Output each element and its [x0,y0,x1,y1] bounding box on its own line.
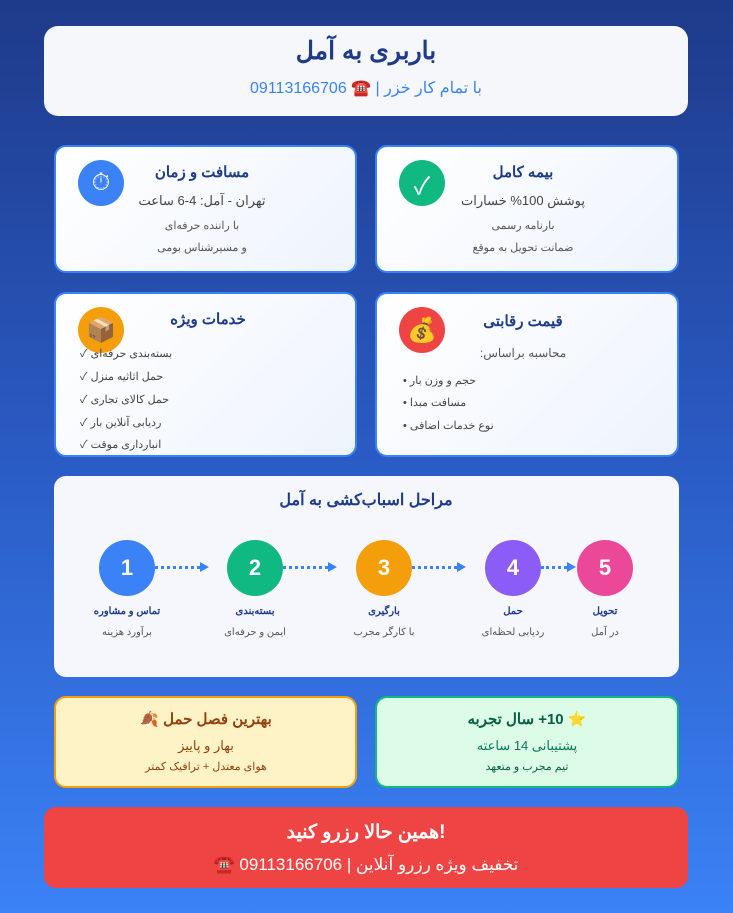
card: best season: بهترین فصل حمل 🍂 [140,711,272,728]
text: ردیابی لحظه‌ای [482,627,544,638]
card: special services: ✓ انبارداری موقت [80,439,161,451]
CTA banner [44,807,688,888]
step 5 [577,540,633,638]
card: distance time: تهران - آمل: 4-6 ساعت [139,193,265,208]
panel: steps: مراحل اسباب‌کشی به آمل [279,492,453,509]
card: pricing: حجم و وزن بار • [403,375,476,387]
text: 3 [378,555,390,580]
text: 4 [507,555,519,580]
card: insurance: بارنامه رسمی [491,220,555,232]
text: 5 [599,555,611,580]
card: pricing: محاسبه براساس: [480,346,566,360]
step 1 [94,540,160,638]
card: distance time: و مسیرشناس بومی [157,242,247,254]
card: experience: تیم مجرب و متعهد [486,761,568,773]
card: special services [54,292,357,457]
card: insurance: بیمه کامل [493,164,553,181]
step 4 [482,540,544,638]
text: بارگیری [368,606,400,617]
card: special services: ✓ حمل کالای تجاری [80,394,169,406]
text: تحویل [593,606,617,617]
icon: stopwatch [78,160,124,206]
text: 2 [249,555,261,580]
card: best season: هوای معتدل + ترافیک کمتر [145,761,267,773]
card: experience: پشتیبانی 14 ساعته [477,738,577,753]
card: insurance [375,145,679,273]
card: pricing: نوع خدمات اضافی • [403,420,494,432]
arrows [155,566,200,569]
icon: money bag: 💰 [407,316,437,344]
card: insurance: پوشش 100% خسارات [461,193,585,208]
step 3 [353,540,415,638]
card: insurance: ضمانت تحویل به موقع [473,242,573,254]
text: 1 [121,555,133,580]
card: experience: ⭐ 10+ سال تجربه [467,711,587,728]
text: تماس و مشاوره [94,606,160,617]
card: distance time [54,145,357,273]
text: ایمن و حرفه‌ای [224,627,286,638]
card: distance time: با راننده حرفه‌ای [165,220,239,232]
card: special services: ✓ بسته‌بندی حرفه‌ای [80,348,172,360]
text: بسته‌بندی [236,606,274,617]
card: distance time: مسافت و زمان [155,164,249,181]
icon: check [399,160,445,206]
icon: check: ✓ [414,172,430,200]
text: برآورد هزینه [102,627,152,638]
card: pricing: قیمت رقابتی [483,313,563,330]
card: special services: خدمات ویژه [170,311,246,328]
text: حمل [503,606,523,617]
card: experience [375,696,679,788]
icon: box: 📦 [86,316,116,344]
step 2 [224,540,286,638]
text: با کارگر مجرب [353,627,415,638]
icon: money bag [399,307,445,353]
card: special services: ✓ حمل اثاثیه منزل [80,371,163,383]
icon: stopwatch: ⏱ [92,169,110,196]
card: special services: ✓ ردیابی آنلاین بار [80,417,161,429]
card: pricing [375,292,679,457]
card: pricing: مسافت مبدا • [403,397,466,409]
subtitle phone: با تمام کار خزر | ☎️ 09113166706 [250,80,482,97]
card: best season: بهار و پاییز [178,738,234,753]
panel: steps [54,476,679,677]
title: باربری به آمل [296,37,436,65]
CTA banner: !همین حالا رزرو کنید [287,822,445,843]
card: best season [54,696,357,788]
text: در آمل [591,627,619,638]
CTA banner: تخفیف ویژه رزرو آنلاین | 09113166706 ☎️ [213,855,519,874]
header panel [44,26,688,116]
icon: box [78,307,124,353]
